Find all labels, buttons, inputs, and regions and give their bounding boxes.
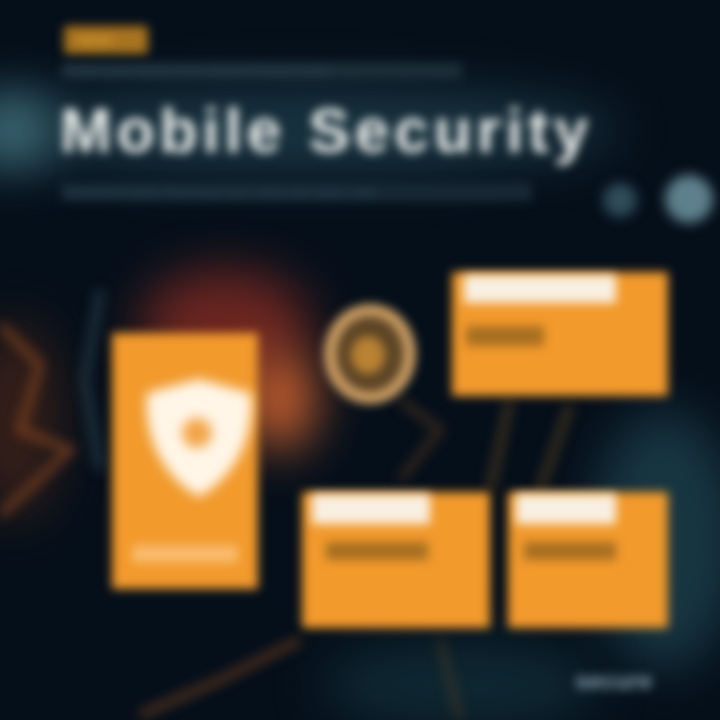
subtitle: Essential habits that keep your data and apps safe [62, 184, 376, 200]
subtitle [62, 183, 532, 201]
card text: Body text [466, 329, 516, 343]
eyebrow line: Protect your device from modern threats today [62, 63, 329, 78]
panel: phone [104, 324, 266, 598]
panel: card bottom middle [294, 484, 498, 636]
panel: card top right [444, 264, 676, 404]
card heading: Heading [312, 501, 364, 517]
phone caption: Protected [132, 547, 183, 561]
eyebrow line [62, 63, 462, 79]
footer logo: secure [575, 668, 652, 695]
card heading: Heading [516, 501, 568, 517]
card text [524, 542, 616, 560]
card text [466, 326, 544, 346]
card heading [312, 494, 430, 524]
card heading [516, 494, 616, 524]
icons: header dots [598, 167, 720, 231]
card heading: Heading [464, 281, 516, 297]
badge: NEW [78, 32, 111, 48]
title: Mobile Security [60, 97, 593, 166]
panel: card bottom right [500, 484, 676, 636]
card heading [464, 275, 616, 303]
icon: ring badge [316, 296, 424, 412]
card text: Body text [326, 544, 376, 558]
card text: Body text [524, 544, 574, 558]
badge [64, 26, 148, 54]
phone caption [132, 545, 238, 563]
card text [326, 542, 428, 560]
icon: shield [137, 370, 261, 504]
